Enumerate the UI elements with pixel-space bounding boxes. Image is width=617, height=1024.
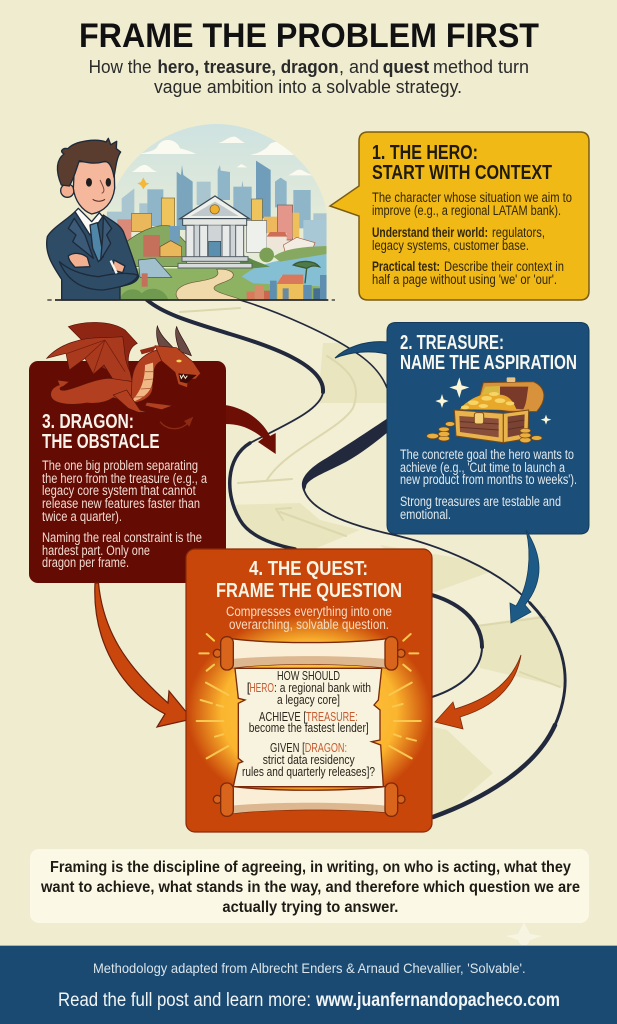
body text: dragon per frame. bbox=[42, 555, 129, 570]
arrow: road to quest bbox=[435, 655, 521, 729]
body text bbox=[372, 190, 572, 287]
question text: strict data residency bbox=[263, 753, 355, 767]
panel: 3 dragon bbox=[29, 322, 226, 583]
subtitle: quest bbox=[383, 56, 429, 77]
ground line bbox=[55, 297, 328, 302]
body text: twice a quarter). bbox=[42, 509, 122, 524]
body text: The concrete goal the hero wants to bbox=[400, 447, 574, 462]
body text: Naming the real constraint is the bbox=[42, 530, 202, 545]
call to action: www.juanfernandopacheco.com bbox=[315, 990, 560, 1011]
question text: : a regional bank with bbox=[274, 681, 371, 695]
intro text: Compresses everything into one bbox=[226, 604, 392, 619]
callout: framing definition bbox=[30, 849, 589, 923]
heading: START WITH CONTEXT bbox=[372, 162, 552, 184]
bank bbox=[180, 196, 249, 219]
icon: faint sparkle bbox=[506, 922, 542, 950]
question text: a legacy core] bbox=[277, 693, 340, 707]
heading: 1. THE HERO: bbox=[372, 142, 478, 164]
body text: new product from months to weeks'). bbox=[400, 472, 577, 487]
question text: HERO bbox=[250, 681, 274, 695]
body text: emotional. bbox=[400, 507, 451, 522]
question text: become the fastest lender] bbox=[249, 721, 369, 735]
subtitle: method turn bbox=[433, 56, 529, 77]
title: FRAME THE PROBLEM FIRST bbox=[79, 17, 539, 55]
call to action bbox=[58, 990, 560, 1011]
body text bbox=[42, 458, 207, 570]
arrow: treasure to quest bbox=[510, 530, 539, 623]
callout: framing definition: actually trying to answer. bbox=[222, 899, 398, 916]
subtitle: How the bbox=[89, 56, 152, 77]
heading: 2. TREASURE: bbox=[400, 332, 504, 354]
body text: achieve (e.g., 'Cut time to launch a bbox=[400, 460, 565, 475]
icon: scroll bbox=[197, 634, 421, 816]
heading bbox=[372, 142, 552, 184]
heading: 3. DRAGON: bbox=[42, 411, 134, 433]
body text: release new features faster than bbox=[42, 496, 200, 511]
bottom houses bbox=[247, 292, 255, 300]
panel: 2 treasure bbox=[335, 322, 589, 534]
question text: GIVEN [ bbox=[270, 741, 305, 755]
heading bbox=[400, 332, 577, 374]
body text: half a page without using 'we' or 'our'. bbox=[372, 272, 557, 287]
body text: The one big problem separating bbox=[42, 458, 198, 473]
body text: improve (e.g., a regional LATAM bank). bbox=[372, 203, 561, 218]
question text: rules and quarterly releases]? bbox=[242, 765, 375, 779]
heading: THE OBSTACLE bbox=[42, 431, 160, 453]
body text: Practical test: bbox=[372, 259, 440, 274]
winding road bbox=[147, 300, 575, 825]
body text: The character whose situation we aim to bbox=[372, 190, 572, 205]
man bbox=[47, 138, 139, 300]
body text: Strong treasures are testable and bbox=[400, 494, 561, 509]
icon: dragon bbox=[47, 322, 201, 429]
panel: 1 the hero bbox=[330, 132, 589, 300]
subtitle bbox=[89, 56, 529, 97]
body text: the hero from the treasure (e.g., a bbox=[42, 471, 207, 486]
intro text: overarching, solvable question. bbox=[229, 617, 389, 632]
question text: ACHIEVE [ bbox=[259, 710, 306, 724]
intro text bbox=[226, 604, 392, 632]
sky dome city bbox=[103, 120, 330, 302]
arrow: dragon to quest bbox=[95, 583, 192, 727]
body text: regulators, bbox=[492, 225, 545, 240]
body text: legacy core system that cannot bbox=[42, 483, 196, 498]
subtitle: hero, treasure, dragon bbox=[158, 56, 338, 77]
subtitle: , and bbox=[339, 56, 379, 77]
body text: Describe their context in bbox=[444, 259, 564, 274]
question text: DRAGON: bbox=[305, 741, 347, 755]
icon: treasure chest bbox=[427, 377, 551, 443]
callout: framing definition: want to achieve, what stands in the way, and therefore which question we are bbox=[40, 879, 580, 896]
panel: 4 the quest bbox=[186, 549, 432, 832]
question text: HOW SHOULD bbox=[277, 669, 340, 683]
subtitle: vague ambition into a solvable strategy. bbox=[154, 76, 462, 97]
question text bbox=[242, 669, 375, 779]
footer bbox=[0, 945, 617, 1024]
call to action: Read the full post and learn more: bbox=[58, 990, 311, 1011]
body text: hardest part. Only one bbox=[42, 543, 150, 558]
citation: Methodology adapted from Albrecht Enders & Arnaud Chevallier, 'Solvable'. bbox=[93, 960, 526, 976]
heading bbox=[42, 411, 160, 453]
heading: 4. THE QUEST: bbox=[249, 558, 368, 580]
body text: Understand their world: bbox=[372, 225, 488, 240]
arrow: dragon panel to road bbox=[225, 405, 276, 454]
body text: legacy systems, customer base. bbox=[372, 238, 529, 253]
ground and water bbox=[120, 268, 320, 300]
question text: TREASURE: bbox=[306, 710, 358, 724]
body text bbox=[400, 447, 577, 522]
trees bbox=[120, 289, 168, 300]
sand road bbox=[176, 269, 243, 301]
question text: [ bbox=[247, 681, 251, 695]
heading bbox=[216, 558, 402, 602]
heading: FRAME THE QUESTION bbox=[216, 580, 402, 602]
hero illustration bbox=[47, 120, 335, 302]
callout: framing definition: Framing is the discipline of agreeing, in writing, on who is acting, what they bbox=[50, 859, 571, 876]
